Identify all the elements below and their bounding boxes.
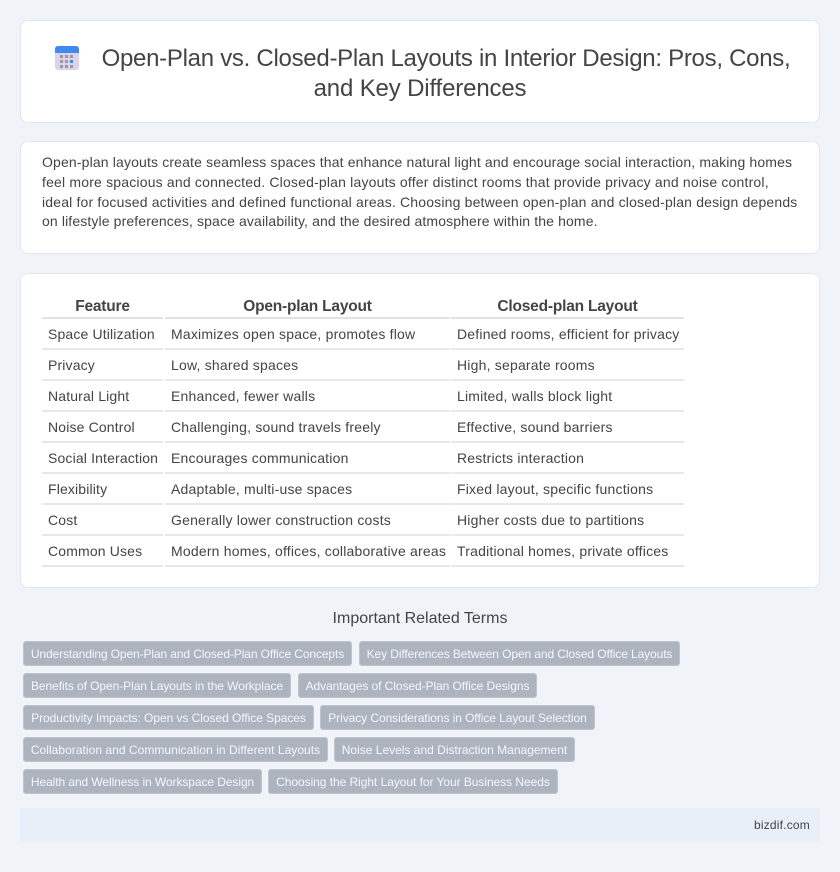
comparison table: Enhanced, fewer walls <box>171 388 315 404</box>
comparison table: Generally lower construction costs <box>171 512 391 528</box>
comparison table: Modern homes, offices, collaborative areas <box>171 543 446 559</box>
comparison table: Space Utilization <box>48 326 155 342</box>
text block: introduction: Open-plan layouts create seamless spaces that enhance natural light and encourage social interaction, making homes <box>42 154 792 170</box>
heading: related terms: Important Related Terms <box>333 610 507 627</box>
comparison table: Noise Control <box>48 419 135 435</box>
related term tags: Collaboration and Communication in Different Layouts <box>31 743 320 757</box>
comparison table: Effective, sound barriers <box>457 419 613 435</box>
comparison table: Fixed layout, specific functions <box>457 481 653 497</box>
header: Closed-plan Layout <box>451 298 684 319</box>
title <box>102 45 790 102</box>
related term tags: Key Differences Between Open and Closed Office Layouts <box>367 647 672 661</box>
comparison table: Maximizes open space, promotes flow <box>171 326 415 342</box>
header: Open-plan Layout <box>165 298 450 319</box>
comparison table: Flexibility <box>48 481 107 497</box>
related term tags: Understanding Open-Plan and Closed-Plan Office Concepts <box>31 647 344 661</box>
header: Feature: Feature <box>75 298 130 315</box>
comparison table: Social Interaction <box>48 450 158 466</box>
header: Feature <box>42 298 163 319</box>
comparison table: Challenging, sound travels freely <box>171 419 381 435</box>
related term tags: Benefits of Open-Plan Layouts in the Workplace <box>31 679 283 693</box>
comparison table: Restricts interaction <box>457 450 584 466</box>
footer text: bizdif.com <box>754 818 810 832</box>
related term tags: Noise Levels and Distraction Management <box>342 743 567 757</box>
related term tags: Productivity Impacts: Open vs Closed Office Spaces <box>31 711 306 725</box>
comparison table: Adaptable, multi-use spaces <box>171 481 352 497</box>
comparison table: Higher costs due to partitions <box>457 512 644 528</box>
text block: introduction: feel more spacious and connected. Closed-plan layouts offer distinct rooms that provide privacy and noise control, <box>42 174 769 190</box>
comparison table: Cost <box>48 512 77 528</box>
title: and Key Differences <box>314 75 526 102</box>
related term tags: Advantages of Closed-Plan Office Designs <box>306 679 529 693</box>
related term tags: Privacy Considerations in Office Layout Selection <box>328 711 587 725</box>
text block: introduction: ideal for focused activities and defined functional areas. Choosing between open-plan and closed-plan design depends <box>42 194 797 210</box>
text block: introduction: on lifestyle preferences, space availability, and the desired atmosphere within the home. <box>42 213 598 229</box>
comparison table: Encourages communication <box>171 450 349 466</box>
comparison table: Common Uses <box>48 543 142 559</box>
icon: calendar grid <box>55 46 79 70</box>
comparison table: Limited, walls block light <box>457 388 612 404</box>
footer bar <box>20 808 820 842</box>
comparison table: Privacy <box>48 357 95 373</box>
panel: comparison table card <box>20 273 820 588</box>
header: Open-plan Layout: Open-plan Layout <box>243 298 372 315</box>
related term tags <box>23 641 680 794</box>
related term tags: Choosing the Right Layout for Your Business Needs <box>276 775 550 789</box>
comparison table: Defined rooms, efficient for privacy <box>457 326 679 342</box>
text block: introduction <box>42 154 797 229</box>
comparison table: Natural Light <box>48 388 129 404</box>
related term tags: Health and Wellness in Workspace Design <box>31 775 254 789</box>
panel: intro text card <box>20 141 820 254</box>
comparison table: High, separate rooms <box>457 357 595 373</box>
comparison table <box>42 298 684 567</box>
panel: title card <box>20 20 820 123</box>
header: Closed-plan Layout: Closed-plan Layout <box>497 298 638 315</box>
comparison table: Low, shared spaces <box>171 357 298 373</box>
title: Open-Plan vs. Closed-Plan Layouts in Interior Design: Pros, Cons, <box>102 45 790 72</box>
comparison table: Traditional homes, private offices <box>457 543 668 559</box>
